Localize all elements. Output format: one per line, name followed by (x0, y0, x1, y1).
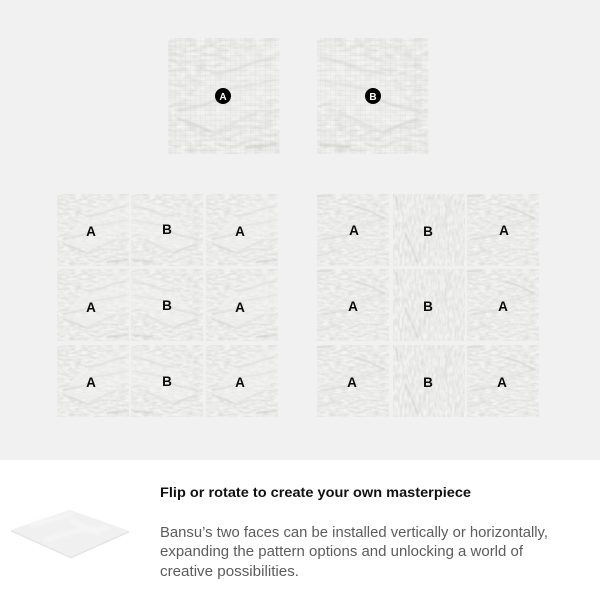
tile: face B with badge: B (369, 92, 377, 103)
tile: face A with badge (168, 38, 279, 154)
body text: creative possibilities. (160, 564, 299, 580)
page background (0, 0, 600, 460)
tile: face B with badge (317, 38, 428, 154)
panel: rotated layout pattern: B (423, 375, 433, 390)
panel: horizontal layout pattern: B (162, 298, 172, 313)
panel: description (0, 460, 600, 600)
body text: Bansu’s two faces can be installed vertically or horizontally, (160, 525, 548, 541)
image: tile in perspective (11, 510, 129, 558)
panel: rotated layout pattern: A (349, 223, 359, 238)
panel: horizontal layout pattern: A (86, 375, 96, 390)
panel: horizontal layout pattern (57, 194, 278, 417)
tile: face A with badge: A (219, 92, 227, 103)
panel: horizontal layout pattern: A (235, 224, 245, 239)
panel: horizontal layout pattern: A (86, 224, 96, 239)
panel: horizontal layout pattern: A (235, 300, 245, 315)
panel: horizontal layout pattern: B (162, 222, 172, 237)
panel: rotated layout pattern: A (497, 375, 507, 390)
panel: two faces of the tile (168, 38, 428, 154)
panel: rotated layout pattern: A (347, 375, 357, 390)
panel: rotated layout pattern: A (348, 299, 358, 314)
heading: Flip or rotate to create your own masterpiece (160, 485, 472, 500)
body text (160, 525, 548, 580)
panel: horizontal layout pattern: A (235, 375, 245, 390)
body text: expanding the pattern options and unlocking a world of (160, 544, 524, 560)
panel: rotated layout pattern: A (499, 223, 509, 238)
panel: rotated layout pattern: B (423, 224, 433, 239)
panel: rotated layout pattern: B (423, 299, 433, 314)
panel: horizontal layout pattern: A (86, 300, 96, 315)
panel: rotated layout pattern (317, 194, 539, 417)
panel: rotated layout pattern: A (498, 299, 508, 314)
panel: horizontal layout pattern: B (162, 374, 172, 389)
